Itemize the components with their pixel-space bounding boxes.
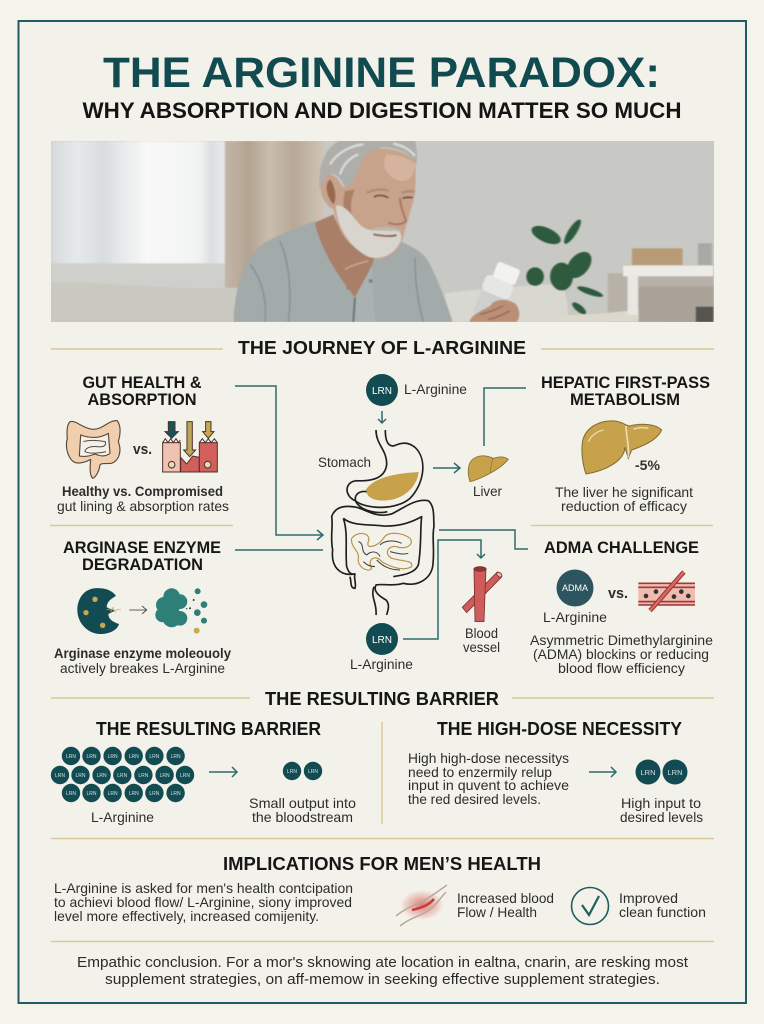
section heading: journey: THE JOURNEY OF L-ARGININE xyxy=(238,338,526,358)
text: high-dose explanation: need to enzermily relup xyxy=(408,764,552,780)
connector arrow: gut health to intestine xyxy=(235,386,323,540)
chart: many L-Arginine molecules: LRN xyxy=(160,773,170,779)
beard xyxy=(336,206,401,258)
chart: many L-Arginine molecules: LRN xyxy=(66,791,76,797)
label: top L-Arginine: L-Arginine xyxy=(404,381,467,397)
icon: small output molecules: LRN xyxy=(287,769,297,775)
label: L-Arginine: L-Arginine xyxy=(543,609,607,625)
label: minus five percent: -5% xyxy=(635,457,661,473)
caption: gut lining: Healthy vs. Compromised xyxy=(62,483,223,499)
caption: high input: desired levels xyxy=(620,809,703,825)
chart: many L-Arginine molecules: LRN xyxy=(180,773,190,779)
icon: healthy and compromised gut lining cells xyxy=(163,422,217,472)
chart: many L-Arginine molecules: LRN xyxy=(129,754,139,760)
caption: arginase: actively breakes L-Arginine xyxy=(60,660,225,676)
chart: many L-Arginine molecules: LRN xyxy=(66,754,76,760)
divider: above implications xyxy=(51,838,714,840)
icon: top L-Arginine molecule xyxy=(366,374,398,406)
label: vs: vs. xyxy=(133,441,152,458)
title: THE ARGININE PARADOX: xyxy=(103,49,660,97)
connector: liver to hepatic panel xyxy=(484,388,526,446)
vertical divider xyxy=(381,722,383,824)
icon: enzyme breaking arginine xyxy=(77,588,207,634)
chart: many L-Arginine molecules: LRN xyxy=(149,791,160,797)
caption: increased blood flow: Increased blood xyxy=(457,890,554,906)
icon: increased blood flow xyxy=(396,885,447,926)
caption: increased blood flow: Flow / Health xyxy=(457,904,537,920)
icon: bottom L-Arginine molecule: LRN xyxy=(372,635,392,646)
chart: many L-Arginine molecules: LRN xyxy=(75,773,86,779)
icon: high input molecules xyxy=(636,760,688,784)
chart: many L-Arginine molecules: LRN xyxy=(97,773,107,779)
icon: top L-Arginine molecule: LRN xyxy=(372,386,392,397)
chart: many L-Arginine molecules: LRN xyxy=(138,773,149,779)
icon: small liver xyxy=(468,456,508,482)
sofa xyxy=(52,283,165,288)
panel: high-dose necessity xyxy=(408,719,703,825)
heading: implications: IMPLICATIONS FOR MEN’S HEALTH xyxy=(223,854,541,874)
icon: check mark xyxy=(572,888,608,924)
label: stomach: Stomach xyxy=(318,454,371,470)
caption: arginase: Arginase enzyme moleouoly xyxy=(54,645,231,661)
heading: ADMA: ADMA CHALLENGE xyxy=(544,538,699,557)
heading: high-dose: THE HIGH-DOSE NECESSITY xyxy=(437,719,682,739)
central digestive diagram xyxy=(318,374,528,672)
caption: ADMA: blood flow efficiency xyxy=(558,660,685,676)
bottle xyxy=(474,262,520,312)
caption: ADMA: (ADMA) blockins or reducing xyxy=(533,646,709,662)
icon: blood vessel xyxy=(462,567,503,622)
side table and box xyxy=(632,248,683,265)
label: bottom L-Arginine: L-Arginine xyxy=(350,656,413,672)
conclusion: Empathic conclusion. For a mor's sknowing ate location in ealtna, cnarin, are resking most xyxy=(77,954,689,971)
subtitle: WHY ABSORPTION AND DIGESTION MATTER SO MUCH xyxy=(82,98,682,123)
icon: high input molecules: LRN xyxy=(640,768,656,777)
chart: many L-Arginine molecules: LRN xyxy=(149,754,160,760)
neck xyxy=(315,214,375,298)
connector: arginase to intestine xyxy=(235,549,323,551)
icon: small output molecules: LRN xyxy=(308,769,318,775)
connector: intestine to ADMA panel xyxy=(439,530,528,549)
arrow: barrier xyxy=(209,767,237,777)
heading: gut health: GUT HEALTH & xyxy=(82,373,202,392)
plant xyxy=(526,218,605,316)
panel: hepatic first-pass metabolism xyxy=(541,373,710,514)
icon: healthy intestine xyxy=(66,421,120,478)
divider left xyxy=(50,524,233,526)
arrow into stomach xyxy=(378,411,386,423)
section heading: resulting barrier: THE RESULTING BARRIER xyxy=(265,689,499,709)
caption: improved function: clean function xyxy=(619,904,706,920)
shirt xyxy=(233,221,453,322)
label: blood vessel: Blood xyxy=(465,625,498,641)
caption: small output: the bloodstream xyxy=(252,809,353,825)
chart: many L-Arginine molecules: LRN xyxy=(129,791,139,797)
label: blood vessel: vessel xyxy=(463,639,500,655)
arrow: high-dose xyxy=(589,767,616,777)
icon: ADMA molecule: ADMA xyxy=(562,583,588,593)
conclusion: supplement strategies, on aff-memow in seeking effective supplement strategies. xyxy=(105,971,660,988)
heading: arginase: DEGRADATION xyxy=(82,555,203,574)
chart: many L-Arginine molecules: LRN xyxy=(55,773,65,779)
panel: gut health and absorption xyxy=(57,373,229,514)
caption: hepatic: reduction of efficacy xyxy=(561,498,687,514)
stomach xyxy=(347,430,423,513)
divider right xyxy=(531,524,713,526)
chart: many L-Arginine molecules: LRN xyxy=(171,791,181,797)
caption: ADMA: Asymmetric Dimethylarginine xyxy=(530,632,713,648)
heading: hepatic: HEPATIC FIRST-PASS xyxy=(541,373,710,392)
connector: arginine to blood vessel xyxy=(403,540,485,639)
label: L-Arginine: L-Arginine xyxy=(91,809,154,825)
caption: hepatic: The liver he significant xyxy=(555,484,693,500)
text: high-dose explanation: High high-dose necessitys xyxy=(408,750,569,766)
caption: high input: High input to xyxy=(621,795,701,811)
eyes, brows and nose xyxy=(367,189,415,193)
text: high-dose explanation: the red desired levels. xyxy=(408,791,541,807)
icon: large liver xyxy=(582,421,662,474)
label: liver: Liver xyxy=(473,483,502,499)
chart: many L-Arginine molecules: LRN xyxy=(117,773,128,779)
icon: bottom L-Arginine molecule xyxy=(366,623,398,655)
panel: implications for men's health xyxy=(54,854,706,926)
panel: arginase enzyme degradation xyxy=(54,538,231,676)
panel: ADMA challenge xyxy=(530,538,713,676)
divider: above conclusion xyxy=(51,940,714,942)
icon: blocked vessel xyxy=(638,572,695,611)
chart: many L-Arginine molecules: LRN xyxy=(108,791,118,797)
icon: high input molecules: LRN xyxy=(667,768,683,777)
heading: resulting barrier: THE RESULTING BARRIER xyxy=(96,719,321,739)
arrow: stomach to liver xyxy=(433,463,460,473)
text: high-dose explanation: input in quvent to achieve xyxy=(408,777,569,793)
hand xyxy=(470,300,519,322)
chart: many L-Arginine molecules: LRN xyxy=(171,754,181,760)
caption: small output: Small output into xyxy=(249,795,356,811)
heading: hepatic: METABOLISM xyxy=(570,390,680,409)
caption: gut lining: gut lining & absorption rates xyxy=(57,498,229,514)
label: vs: vs. xyxy=(608,585,628,602)
text: implications: L-Arginine is asked for men's health contcipation xyxy=(54,880,353,896)
intestines xyxy=(332,500,434,615)
panel: resulting barrier xyxy=(51,719,356,825)
hair xyxy=(319,139,417,191)
chart: many L-Arginine molecules xyxy=(51,747,194,802)
face xyxy=(321,148,416,259)
chart: many L-Arginine molecules: LRN xyxy=(86,754,97,760)
text: implications: to achievi blood flow/ L-Arginine, siony improved xyxy=(54,894,352,910)
heading: arginase: ARGINASE ENZYME xyxy=(63,538,221,557)
text: implications: level more effectively, increased comijenity. xyxy=(54,908,319,924)
caption: improved function: Improved xyxy=(619,890,678,906)
photo: older man reading a supplement bottle xyxy=(51,139,714,323)
chart: many L-Arginine molecules: LRN xyxy=(108,754,118,760)
heading: gut health: ABSORPTION xyxy=(88,390,196,409)
chart: many L-Arginine molecules: LRN xyxy=(86,791,97,797)
icon: small output molecules xyxy=(283,762,322,780)
icon: ADMA molecule xyxy=(556,570,594,606)
